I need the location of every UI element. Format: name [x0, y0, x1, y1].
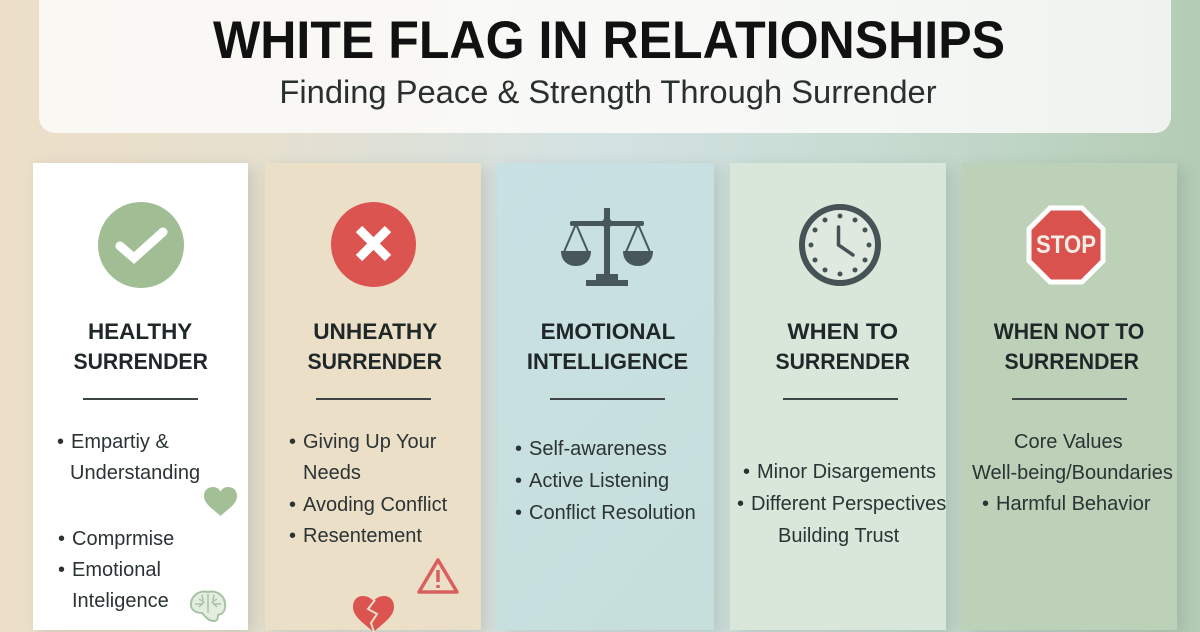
heading — [73, 319, 208, 374]
heading: EMOTIONAL — [540, 319, 675, 344]
bullet list: • — [982, 493, 989, 515]
heading — [308, 319, 442, 374]
bullet list: Conflict Resolution — [529, 502, 696, 524]
panel: when not to surrender — [962, 163, 1177, 630]
icon: green heart — [204, 487, 237, 516]
panel: emotional intelligence — [497, 163, 714, 630]
heading: SURRENDER — [776, 349, 910, 374]
title panel — [39, 0, 1171, 133]
icon: brain — [190, 590, 226, 622]
bullet list: Emotional — [72, 559, 161, 581]
icon: cross mark — [331, 202, 416, 287]
heading: HEALTHY — [88, 319, 193, 344]
heading: SURRENDER — [308, 349, 442, 374]
bullet list: Giving Up Your — [303, 431, 436, 453]
bullet list — [972, 431, 1173, 515]
bullet list — [515, 438, 696, 524]
title: WHITE FLAG IN RELATIONSHIPS — [213, 11, 1005, 70]
bullet list — [737, 461, 946, 547]
bullet list: Empartiy & — [71, 431, 169, 453]
subtitle: Finding Peace & Strength Through Surrender — [279, 73, 937, 110]
bullet list — [57, 431, 200, 612]
bullet list: Needs — [303, 462, 361, 484]
bullet list: Comprmise — [72, 528, 174, 550]
icon: clock — [799, 204, 881, 286]
bullet list: • — [737, 493, 744, 515]
icon: warning triangle — [417, 558, 459, 594]
icon: balance scale — [561, 208, 653, 286]
bullet list: Harmful Behavior — [996, 493, 1151, 515]
bullet list: Different Perspectives — [751, 493, 946, 515]
bullet list: • — [58, 559, 65, 581]
bullet list: Self-awareness — [529, 438, 667, 460]
bullet list: Resentement — [303, 525, 422, 547]
heading: SURRENDER — [73, 349, 208, 374]
bullet list: Well-being/Boundaries — [972, 462, 1173, 484]
bullet list: Active Listening — [529, 470, 669, 492]
bullet list: • — [743, 461, 750, 483]
bullet list: • — [515, 470, 522, 492]
bullet list: • — [515, 438, 522, 460]
bullet list: • — [289, 431, 296, 453]
bullet list: Understanding — [70, 462, 200, 484]
bullet list: Inteligence — [72, 590, 169, 612]
bullet list: • — [515, 502, 522, 524]
icon: stop sign — [1026, 206, 1106, 284]
bullet list: Minor Disargements — [757, 461, 936, 483]
heading: SURRENDER — [1004, 349, 1139, 374]
bullet list — [289, 431, 448, 547]
icon: broken heart — [353, 596, 394, 632]
bullet list: Core Values — [1014, 431, 1123, 453]
panel: when to surrender — [730, 163, 946, 630]
bullet list: Building Trust — [778, 525, 899, 547]
heading: UNHEATHY — [313, 319, 437, 344]
bullet list: Avoding Conflict — [303, 494, 447, 516]
bullet list: • — [289, 525, 296, 547]
heading — [527, 319, 688, 374]
panel: healthy surrender — [33, 163, 248, 630]
icon: stop sign: STOP — [1036, 231, 1096, 259]
panel: unhealthy surrender — [265, 163, 481, 630]
bullet list: • — [57, 431, 64, 453]
icon: check mark — [98, 202, 184, 288]
heading — [994, 319, 1145, 374]
heading — [776, 319, 910, 374]
heading: INTELLIGENCE — [527, 349, 688, 374]
bullet list: • — [58, 528, 65, 550]
heading: WHEN TO — [788, 319, 898, 344]
bullet list: • — [289, 494, 296, 516]
heading: WHEN NOT TO — [994, 319, 1145, 344]
